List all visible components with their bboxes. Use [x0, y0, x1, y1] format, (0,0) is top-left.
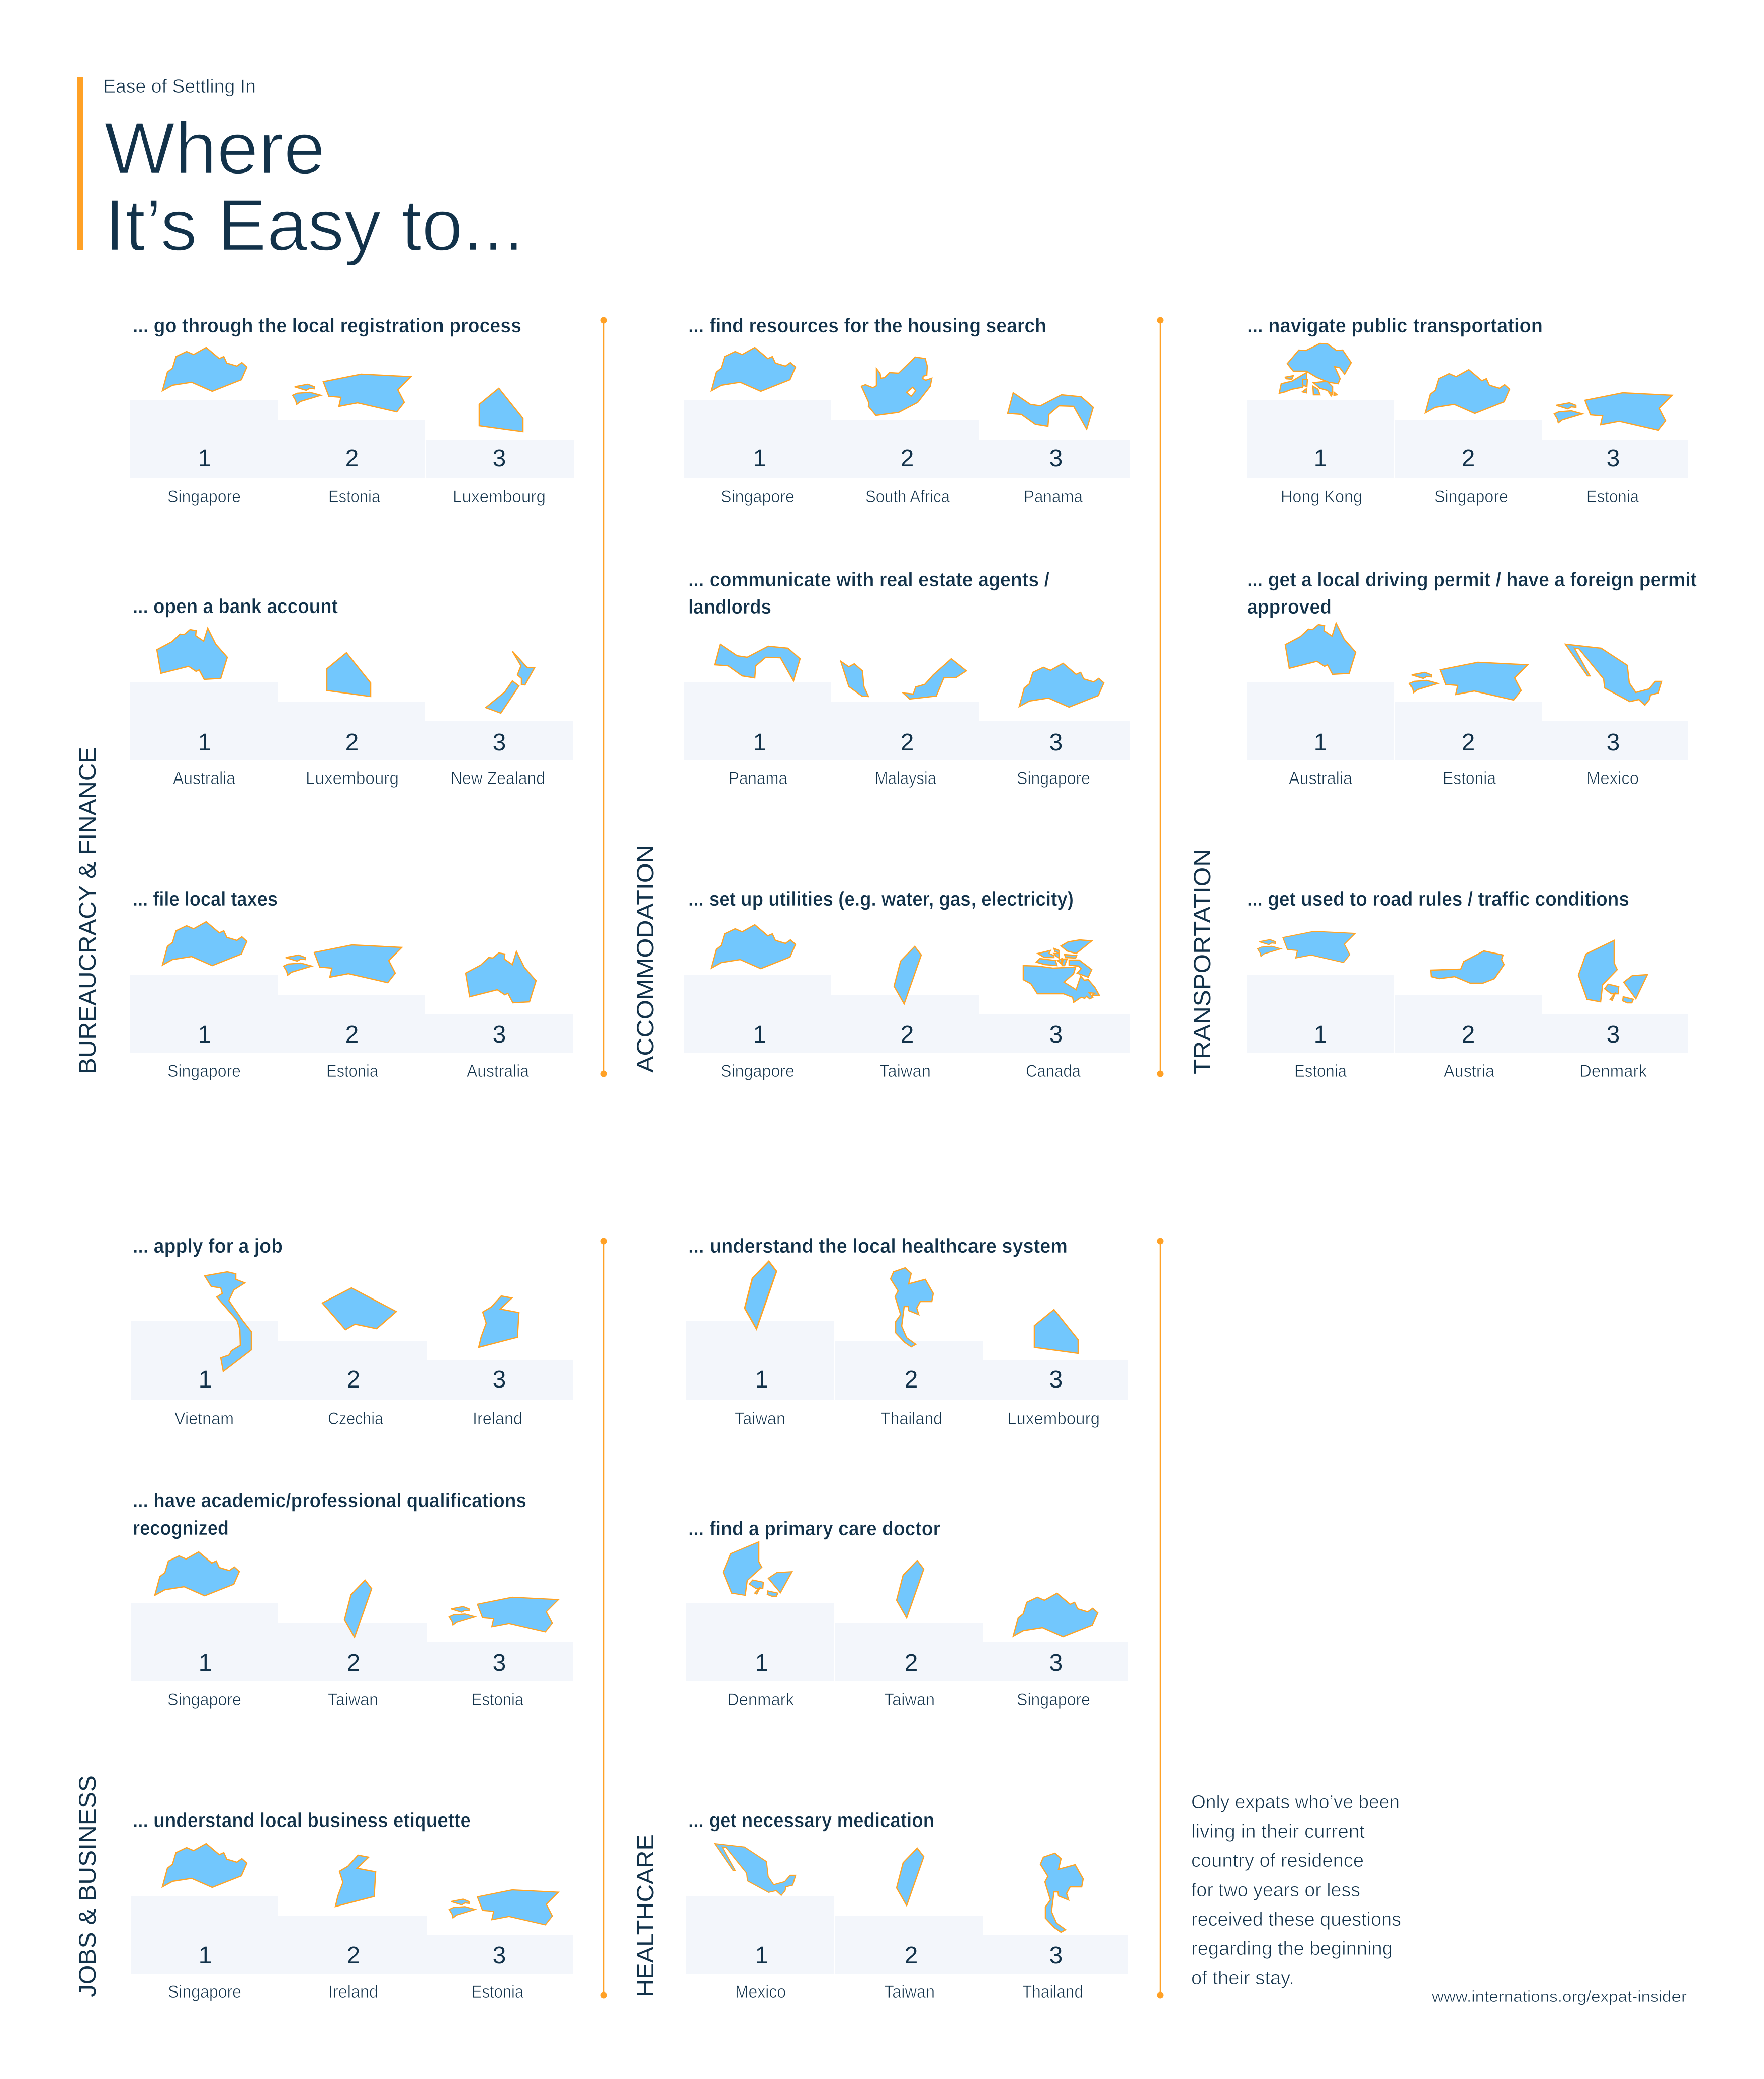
question: ... have academic/professional qualifications	[133, 1490, 526, 1512]
country: Singapore	[1017, 769, 1090, 788]
question: ... find resources for the housing search	[688, 315, 1046, 337]
map: Estonia	[1554, 393, 1672, 430]
rank 1: 1	[198, 729, 211, 756]
map: Estonia	[1258, 931, 1355, 963]
map: Singapore	[711, 925, 796, 969]
map: Estonia	[449, 1597, 558, 1632]
panel: necessary medication	[686, 1809, 1128, 2002]
country: Mexico	[735, 1982, 786, 2002]
question: ... find a primary care doctor	[688, 1518, 940, 1540]
rank 3: 3	[493, 1650, 506, 1676]
map: New Zealand	[486, 651, 535, 713]
rank 2: 2	[905, 1650, 918, 1676]
panel: public transportation	[1247, 315, 1688, 506]
map: Estonia	[293, 374, 411, 412]
podium	[686, 1321, 1128, 1400]
country: Singapore	[721, 487, 795, 506]
country: Singapore	[721, 1062, 795, 1081]
country: Estonia	[1294, 1062, 1347, 1081]
rank 3: 3	[493, 445, 506, 472]
country: Ireland	[328, 1982, 378, 2002]
footnote: living in their current	[1191, 1821, 1365, 1842]
rank 2: 2	[901, 445, 914, 472]
map: Taiwan	[344, 1580, 372, 1637]
rank 3: 3	[1607, 729, 1620, 756]
country: South Africa	[865, 487, 950, 506]
map: Australia	[157, 628, 227, 679]
rank 3: 3	[1049, 729, 1063, 756]
map: Estonia	[284, 945, 402, 983]
map: Singapore	[162, 1844, 247, 1887]
country: Estonia	[328, 487, 380, 506]
country: Singapore	[1017, 1690, 1090, 1709]
rank 1: 1	[753, 1021, 766, 1048]
rank 3: 3	[1049, 1366, 1063, 1393]
rank 2: 2	[347, 1942, 360, 1969]
title: It’s Easy to...	[105, 184, 524, 266]
question: approved	[1247, 596, 1332, 618]
footnote: for two years or less	[1191, 1880, 1360, 1901]
map: Estonia	[449, 1890, 558, 1925]
question: ... get a local driving permit / have a foreign permit	[1247, 569, 1697, 591]
podium	[684, 682, 1130, 760]
panel: apply for a job	[131, 1235, 573, 1428]
podium	[130, 975, 573, 1053]
country: Panama	[729, 769, 787, 788]
map: Mexico	[715, 1844, 796, 1895]
footnote: regarding the beginning	[1191, 1938, 1393, 1959]
country: Estonia	[1443, 769, 1496, 788]
divider line 1 upper	[600, 317, 607, 1077]
map: Luxembourg	[1034, 1310, 1078, 1353]
podium	[131, 1321, 573, 1400]
rank 3: 3	[493, 1021, 506, 1048]
map: Luxembourg	[479, 388, 523, 432]
country: Estonia	[472, 1690, 523, 1709]
question: recognized	[133, 1517, 229, 1539]
divider line 2 lower	[1157, 1238, 1164, 1999]
podium	[686, 1896, 1128, 1974]
question	[133, 1490, 526, 1539]
panel: utilities	[684, 888, 1130, 1081]
category label: Healthcare: HEALTHCARE	[632, 1834, 658, 1997]
accent bar	[77, 77, 83, 250]
rank 1: 1	[198, 1021, 211, 1048]
map: Mexico	[1565, 644, 1662, 705]
question: ... get used to road rules / traffic conditions	[1247, 888, 1629, 910]
category label: Jobs & Business: JOBS & BUSINESS	[74, 1775, 101, 1997]
rank 2: 2	[345, 1021, 359, 1048]
question: ... understand the local healthcare system	[688, 1235, 1068, 1257]
country: Thailand	[880, 1409, 942, 1428]
rank 3: 3	[1607, 1021, 1620, 1048]
rank 2: 2	[901, 729, 914, 756]
map: Australia	[466, 951, 536, 1003]
rank 1: 1	[755, 1366, 768, 1393]
country: Hong Kong	[1281, 487, 1362, 506]
country: Estonia	[326, 1062, 378, 1081]
podium	[130, 682, 573, 760]
country: Taiwan	[879, 1062, 931, 1081]
podium	[1247, 975, 1688, 1053]
map: Luxembourg	[327, 653, 371, 697]
podium	[130, 400, 574, 478]
rank 2: 2	[1462, 1021, 1475, 1048]
panel: healthcare system	[686, 1235, 1128, 1428]
podium	[684, 975, 1130, 1053]
title	[104, 107, 524, 266]
map: Austria	[1431, 951, 1504, 983]
map: Singapore	[1019, 663, 1104, 707]
rank 1: 1	[755, 1650, 768, 1676]
country: Czechia	[328, 1409, 383, 1428]
rank 3: 3	[1049, 1942, 1063, 1969]
country: Taiwan	[328, 1690, 378, 1709]
footnote: of their stay.	[1191, 1968, 1294, 1989]
podium	[684, 400, 1130, 478]
map: Singapore	[711, 348, 796, 391]
country: Canada	[1026, 1062, 1081, 1081]
question: ... open a bank account	[133, 595, 338, 618]
question: ... apply for a job	[133, 1235, 283, 1257]
country: New Zealand	[451, 769, 545, 788]
map: Singapore	[162, 922, 247, 966]
title: Where	[104, 107, 325, 189]
map: Taiwan	[897, 1561, 924, 1618]
country: Singapore	[168, 1982, 241, 2002]
country: Denmark	[727, 1690, 795, 1709]
map: Singapore	[162, 348, 247, 391]
map: Ireland	[479, 1296, 519, 1347]
country: Estonia	[472, 1982, 523, 2002]
rank 1: 1	[755, 1942, 768, 1969]
rank 1: 1	[199, 1942, 212, 1969]
category label: Bureaucracy & Finance: BUREAUCRACY & FINANCE	[74, 747, 101, 1074]
question: landlords	[688, 596, 771, 618]
panel: local taxes	[130, 888, 573, 1081]
rank 2: 2	[901, 1021, 914, 1048]
rank 1: 1	[1314, 445, 1327, 472]
map: Taiwan	[745, 1261, 776, 1329]
map: Panama	[715, 644, 800, 681]
rank 3: 3	[493, 1366, 506, 1393]
rank 1: 1	[1314, 729, 1327, 756]
country: Panama	[1024, 487, 1083, 506]
country: Taiwan	[884, 1690, 935, 1709]
map: Singapore	[1013, 1593, 1098, 1637]
country: Austria	[1444, 1062, 1494, 1081]
rank 2: 2	[347, 1366, 360, 1393]
map: Hong Kong	[1279, 343, 1351, 396]
country: Denmark	[1579, 1062, 1647, 1081]
question: ... understand local business etiquette	[133, 1809, 471, 1832]
country: Singapore	[167, 487, 241, 506]
rank 2: 2	[905, 1366, 918, 1393]
map: Vietnam	[205, 1272, 251, 1371]
country: Australia	[173, 769, 235, 788]
footnote: received these questions	[1191, 1909, 1401, 1930]
subtitle: Ease of Settling In	[103, 76, 256, 97]
map: Czechia	[322, 1288, 396, 1330]
rank 3: 3	[1049, 445, 1063, 472]
country: Singapore	[167, 1062, 241, 1081]
panel: driving permit	[1247, 569, 1697, 788]
panel: bank account	[130, 595, 573, 788]
category label: Transportation: TRANSPORTATION	[1189, 849, 1215, 1074]
country: Vietnam	[174, 1409, 234, 1428]
panel: qualifications recognized	[131, 1490, 573, 1709]
footnote: country of residence	[1191, 1850, 1364, 1871]
question: ... communicate with real estate agents /	[688, 569, 1049, 591]
rank 3: 3	[1049, 1021, 1063, 1048]
rank 1: 1	[753, 729, 766, 756]
map: Taiwan	[894, 946, 921, 1004]
rank 3: 3	[493, 729, 506, 756]
country: Taiwan	[735, 1409, 785, 1428]
country: Singapore	[1434, 487, 1508, 506]
source url: www.internations.org/expat-insider	[1431, 1987, 1687, 2005]
divider line 1 lower	[600, 1238, 607, 1999]
footnote: Only expats who’ve been	[1191, 1792, 1400, 1813]
country: Malaysia	[875, 769, 936, 788]
rank 2: 2	[345, 445, 359, 472]
country: Ireland	[473, 1409, 522, 1428]
podium	[1247, 682, 1688, 760]
map: Canada	[1023, 940, 1099, 1002]
country: Luxembourg	[1007, 1409, 1100, 1428]
panel: housing search	[684, 315, 1130, 506]
country: Thailand	[1022, 1982, 1083, 2002]
question	[688, 569, 1049, 618]
map: Singapore	[155, 1552, 239, 1596]
question: ... set up utilities (e.g. water, gas, electricity)	[688, 888, 1074, 910]
podium	[1247, 400, 1688, 478]
map: Estonia	[1409, 662, 1528, 700]
footnote	[1191, 1792, 1401, 1989]
map: Ireland	[335, 1855, 376, 1907]
country: Mexico	[1586, 769, 1639, 788]
rank 3: 3	[493, 1942, 506, 1969]
question: ... navigate public transportation	[1247, 315, 1543, 337]
rank 1: 1	[199, 1366, 212, 1393]
rank 2: 2	[345, 729, 359, 756]
panel: real estate agents	[684, 569, 1130, 788]
question	[1247, 569, 1697, 618]
map: Malaysia	[841, 659, 966, 699]
map: Thailand	[1040, 1853, 1083, 1932]
country: Taiwan	[884, 1982, 935, 2002]
rank 1: 1	[753, 445, 766, 472]
rank 2: 2	[347, 1650, 360, 1676]
country: Estonia	[1586, 487, 1639, 506]
country: Luxembourg	[306, 769, 399, 788]
map: Panama	[1008, 393, 1093, 429]
map: Singapore	[1425, 370, 1510, 413]
question: ... file local taxes	[133, 888, 278, 910]
rank 1: 1	[199, 1650, 212, 1676]
country: Australia	[1289, 769, 1352, 788]
map: South Africa	[861, 357, 932, 415]
question: ... go through the local registration process	[133, 315, 521, 337]
map: Denmark	[723, 1542, 792, 1596]
question: ... get necessary medication	[688, 1809, 934, 1832]
podium	[131, 1896, 573, 1974]
panel: business etiquette	[131, 1809, 573, 2002]
map: Denmark	[1578, 940, 1647, 1003]
panel: registration process	[130, 315, 574, 506]
country: Singapore	[167, 1690, 241, 1709]
divider line 2 upper	[1157, 317, 1164, 1077]
rank 2: 2	[905, 1942, 918, 1969]
rank 2: 2	[1462, 445, 1475, 472]
map: Australia	[1285, 623, 1356, 674]
category label: Accommodation: ACCOMMODATION	[632, 845, 658, 1073]
rank 2: 2	[1462, 729, 1475, 756]
panel: road rules	[1247, 888, 1688, 1081]
country: Australia	[467, 1062, 529, 1081]
country: Luxembourg	[453, 487, 546, 506]
map: Taiwan	[897, 1848, 924, 1905]
podium	[131, 1603, 573, 1681]
panel: primary care doctor	[686, 1518, 1128, 1709]
map: Thailand	[891, 1268, 933, 1347]
rank 3: 3	[1607, 445, 1620, 472]
rank 1: 1	[1314, 1021, 1327, 1048]
rank 1: 1	[198, 445, 211, 472]
podium	[686, 1603, 1128, 1681]
rank 3: 3	[1049, 1650, 1063, 1676]
